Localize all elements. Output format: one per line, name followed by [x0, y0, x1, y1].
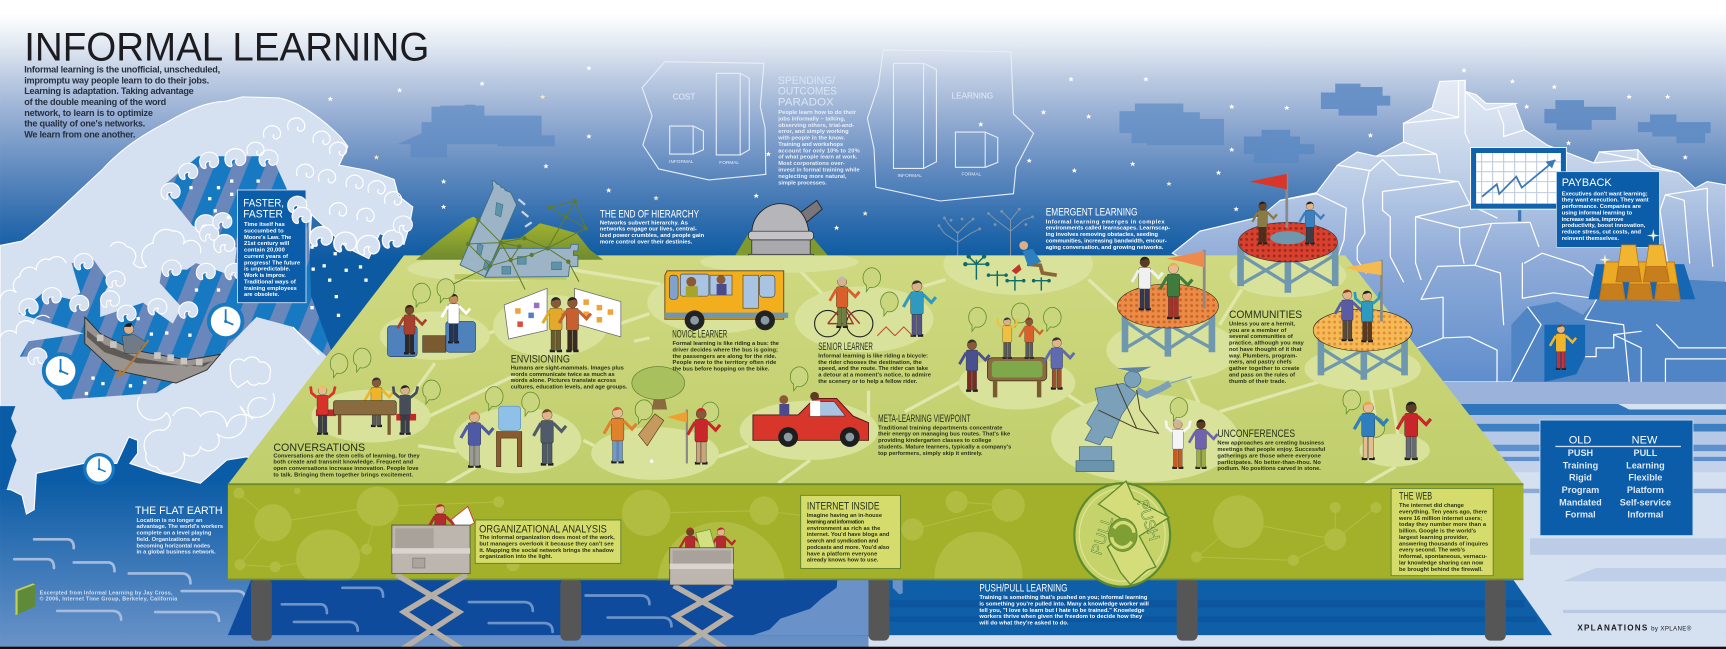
faster, faster callout: FASTER	[243, 208, 283, 220]
meta-learning text: Traditional training departments concentrate	[878, 425, 1002, 431]
emergent learning text: aging conversation, and growing networks.	[1046, 245, 1164, 251]
constellation: cost: COST	[673, 93, 695, 102]
foam outlines	[0, 118, 402, 474]
internet inside box: environment as rich as the	[807, 526, 880, 532]
payback callout: they want execution. They want	[1562, 198, 1649, 204]
senior learner text: the scenery or to help a fellow rider.	[818, 379, 918, 385]
the web box: THE WEB	[1399, 490, 1432, 502]
intro text: network, to learn is to optimize	[24, 108, 153, 118]
the web box: lar knowledge sharing can now	[1399, 560, 1484, 566]
conversations text: both create and transmit knowledge. Frequent and	[273, 460, 414, 466]
faster, faster callout: are obsolete.	[244, 292, 280, 298]
payback callout: reduce stress, cut costs, and	[1562, 230, 1642, 236]
internet inside box: learning and information	[807, 519, 865, 525]
constellation: learning	[867, 50, 1034, 201]
emergent learning text: EMERGENT LEARNING	[1046, 207, 1138, 219]
push/pull learning text: tell you, "I love to learn but I hate to be trained." Knowledge	[979, 608, 1144, 614]
novice learner text: Formal learning is like riding a bus: the	[673, 341, 779, 347]
faster, faster callout: progress! The future	[244, 260, 300, 266]
payback callout: increase sales, improve	[1562, 217, 1623, 223]
envisioning text: words alone. Pictures translate across	[510, 378, 616, 384]
the web box: informal, spontaneous, vernacu-	[1399, 554, 1487, 560]
push pull circle: PUSH	[1133, 498, 1162, 543]
communities text: you are a member of	[1229, 328, 1286, 334]
wave body	[0, 97, 413, 514]
faster, faster callout: contain 20,000	[244, 248, 285, 254]
scissor lift: left	[392, 504, 474, 649]
envisioning text: words communicate twice as much as	[510, 372, 615, 378]
inner foam curls	[19, 149, 412, 364]
conversations text: to talk. Bringing them together brings excitement.	[273, 473, 414, 479]
organizational analysis box: ORGANIZATIONAL ANALYSIS	[479, 523, 607, 535]
clock icons	[42, 303, 244, 485]
spending outcomes paradox: of what people learn at work.	[778, 155, 858, 161]
red car	[753, 392, 869, 447]
cyclist and senior learner	[815, 276, 936, 337]
constellation: cost: FORMAL	[719, 160, 739, 166]
constellation: learning: FORMAL	[961, 172, 982, 178]
faster, faster callout: training employees	[244, 286, 297, 292]
envisioning text: cultures, education levels, and age groups.	[511, 385, 628, 391]
spending outcomes paradox: with people in the know.	[777, 136, 845, 142]
book credit: Excerpted from Informal Learning by Jay Cross,	[40, 590, 173, 596]
stars	[327, 65, 1688, 230]
spending outcomes paradox: PARADOX	[778, 96, 834, 108]
payback callout: using informal learning to	[1562, 210, 1633, 216]
faster, faster callout: Work is improv.	[244, 273, 286, 279]
intro text	[24, 65, 220, 139]
novice learner text: the bus before hopping on the bike.	[673, 367, 770, 373]
spending outcomes paradox: neglecting more natural,	[778, 174, 847, 180]
golf scene	[604, 367, 720, 465]
end of hierarchy text: THE END OF HIERARCHY	[600, 208, 699, 220]
meta-learning text: META-LEARNING VIEWPOINT	[878, 413, 971, 425]
senior learner text: a detour at a moment's notice, to admire	[818, 373, 931, 379]
scissor lift: right	[670, 528, 735, 649]
constellation: learning: LEARNING	[952, 92, 993, 101]
the web box: billion. Google is the world's	[1399, 529, 1476, 535]
intro text: impromptu way people learn to do their jobs.	[24, 75, 209, 85]
old vs new table: Mandated	[1559, 497, 1602, 507]
wall	[485, 244, 578, 277]
senior learner text	[818, 341, 931, 385]
old vs new table: Formal	[1565, 510, 1596, 520]
unconferences text: podium. No positions carved in stone.	[1217, 466, 1321, 472]
the web box: The internet did change	[1399, 503, 1464, 509]
old vs new table: Self-service	[1620, 497, 1671, 507]
windows	[477, 203, 561, 274]
faster, faster callout: Moore's Law. The	[244, 235, 291, 241]
constellation: cost	[642, 62, 766, 180]
spending outcomes paradox: SPENDING/	[778, 75, 836, 87]
icon: speech bubbles	[330, 268, 1385, 441]
publisher logo: XPLANATIONS	[1577, 624, 1648, 633]
payback callout: PAYBACK	[1562, 177, 1612, 189]
meta-learning text: their energy on managing bus routes. That's like	[878, 432, 1010, 438]
senior learner text: SENIOR LEARNER	[818, 341, 873, 353]
community platform: yellow	[1313, 260, 1412, 380]
emergent learning text	[1046, 207, 1170, 251]
faster, faster callout	[237, 190, 311, 303]
conversations text: open conversations increase innovation. People love	[273, 466, 419, 472]
communities text: several communities of	[1229, 334, 1293, 340]
clouds	[397, 84, 1711, 163]
communities text: COMMUNITIES	[1229, 309, 1302, 321]
fallen stones	[518, 199, 532, 227]
faster, faster callout: succumbed to	[244, 228, 284, 234]
internet inside box	[801, 495, 900, 568]
communities text: Unless you are a hermit,	[1229, 321, 1295, 327]
communities text: way. Plumbers, program-	[1228, 353, 1297, 359]
white dots	[85, 179, 368, 395]
emergent learning text: environments called learnscapes. Learnscap-	[1046, 226, 1170, 232]
novice learner text	[672, 329, 779, 373]
flat earth text: advantage. The world's workers	[137, 524, 223, 530]
flat earth text: THE FLAT EARTH	[135, 505, 223, 517]
intro text: of the double meaning of the word	[24, 97, 166, 107]
network	[454, 199, 588, 289]
push/pull learning text	[978, 582, 1149, 627]
figures: sofa conversation	[387, 294, 476, 357]
old vs new table: Platform	[1627, 485, 1664, 495]
intro text: Informal learning is the unofficial, unscheduled,	[24, 65, 220, 75]
whiteboards	[504, 288, 621, 352]
faster, faster callout: current years of	[244, 254, 288, 260]
novice learner text: the passengers are along for the ride.	[673, 354, 777, 360]
envisioning text: ENVISIONING	[511, 354, 570, 366]
pale base band	[455, 274, 567, 280]
sea dashes	[14, 539, 245, 621]
faster, faster callout: is unpredictable.	[244, 267, 291, 273]
end of hierarchy text: Networks subvert hierarchy. As	[600, 220, 688, 226]
spending outcomes paradox: observing others, trial-and-	[778, 123, 854, 129]
conversations text	[273, 442, 421, 479]
organizational analysis box: The informal organization does most of the work,	[479, 535, 615, 541]
old vs new table: Learning	[1626, 460, 1665, 470]
internet inside box: already knows how to use.	[807, 558, 879, 564]
left edge water	[0, 406, 17, 490]
intro text: Learning is adaptation. Taking advantage	[24, 86, 194, 96]
unconferences text	[1217, 428, 1326, 472]
novice learner text: driver decides where the bus is going;	[673, 347, 778, 353]
pool table	[959, 318, 1074, 397]
push/pull learning text: workers thrive when given the freedom to decide how they	[978, 614, 1143, 620]
payback callout	[1556, 172, 1659, 247]
spending outcomes paradox: Most corporations over-	[778, 161, 845, 167]
end of hierarchy text: more control over their destinies.	[600, 239, 693, 245]
icebergs	[1172, 80, 1726, 382]
meeting at table	[311, 378, 418, 435]
flat earth text: complete on a level playing	[137, 531, 212, 537]
internet inside box: Imagine having an in-house	[807, 513, 882, 519]
bottom bar	[0, 647, 1726, 649]
last pair of people	[1354, 402, 1431, 460]
book icon	[15, 583, 35, 615]
push pull circle: PULL	[1088, 514, 1117, 557]
senior learner text: the rider chooses the destination, the	[818, 360, 922, 366]
castle	[416, 181, 603, 289]
water under the platform	[228, 580, 1726, 647]
tower	[460, 181, 517, 277]
constellation: learning: INFORMAL	[897, 173, 922, 179]
book credit: © 2006, Internet Time Group, Berkeley, California	[40, 596, 178, 603]
statue being pulled down	[1076, 367, 1218, 472]
old vs new table: PUSH	[1568, 448, 1593, 458]
payback callout: productivity, boost innovation,	[1562, 223, 1646, 229]
flat earth text: in a global business network.	[137, 550, 216, 556]
senior learner text: speed, and the route. The rider can take	[818, 366, 928, 372]
intro text: the quality of one's networks.	[24, 119, 145, 129]
faster, faster callout: Traditional ways of	[244, 279, 296, 285]
publisher logo	[1577, 624, 1692, 633]
unconferences text: participates. No better-than-thou. No	[1217, 460, 1321, 466]
emergent learning text: communities, increasing bandwidth, encour-	[1046, 238, 1167, 244]
communities text: and pass on the rules of	[1229, 372, 1295, 378]
novice learner text: People new to the territory often ride	[673, 360, 776, 366]
the web box: answering thousands of inquires	[1399, 541, 1488, 547]
faster, faster callout: 21st century will	[244, 241, 290, 247]
payback callout: reinvent themselves.	[1562, 236, 1619, 242]
unconferences text: UNCONFERENCES	[1217, 428, 1295, 440]
push/pull learning text: is something you're pulled into. Many a knowledge worker will	[979, 601, 1149, 607]
the web box: largest learning provider,	[1399, 535, 1469, 541]
communities text: not have thought of it that	[1229, 347, 1302, 353]
front network circles	[234, 486, 1382, 580]
berg silhouette	[1172, 80, 1726, 382]
flat earth text: field. Organizations are	[137, 537, 200, 543]
senior learner text: Informal learning is like riding a bicycle:	[818, 353, 928, 359]
platform front face	[228, 483, 1524, 580]
internet inside box: search and syndication and	[807, 539, 879, 545]
flat earth text: Location is no longer an	[137, 518, 203, 524]
communities text: gather together to create	[1229, 366, 1299, 372]
meta-learning text: providing kindergarten classes to college	[878, 438, 991, 444]
barrel stripes upper	[162, 156, 312, 308]
meta-learning text	[878, 413, 1011, 457]
envisioning text	[510, 354, 628, 391]
the web box: every second. The web's	[1399, 548, 1465, 554]
organizational analysis box: organization into the light.	[479, 554, 553, 560]
internet inside box: internet. You'd have blogs and	[807, 532, 890, 538]
push/pull learning text: Training is something that's pushed on you; informal learning	[979, 595, 1148, 601]
platform legs	[251, 579, 1506, 641]
organizational analysis box	[475, 520, 621, 563]
old vs new table: Informal	[1627, 510, 1663, 520]
communities text: thumb of their trade.	[1229, 379, 1287, 385]
old vs new table	[1540, 420, 1693, 536]
spending outcomes paradox: simple processes.	[778, 180, 827, 186]
push pull circle	[1074, 481, 1170, 587]
platform top surface	[228, 233, 1523, 484]
observatory	[735, 200, 828, 259]
bus	[665, 271, 788, 330]
book credit	[40, 590, 178, 603]
old vs new table: Training	[1563, 460, 1598, 470]
wave illustration	[0, 97, 413, 514]
hiker figure	[1550, 324, 1576, 370]
waterfall	[753, 580, 869, 635]
emergent grey trees	[938, 208, 1034, 260]
constellation: cost: INFORMAL	[669, 159, 694, 165]
payback callout: performance. Companies are	[1562, 204, 1641, 210]
intro text: We learn from one another.	[24, 129, 135, 139]
meta-learning text: students. Mature learners, typically a company's	[878, 444, 1011, 450]
spending outcomes paradox	[777, 75, 860, 186]
gold bars	[1588, 229, 1695, 300]
unconferences text: gatherings are those where everyone	[1217, 453, 1321, 459]
community platform: orange	[1117, 250, 1219, 357]
spending outcomes paradox: error, and simply working	[778, 129, 849, 135]
spending outcomes paradox: jobs informally – talking,	[777, 116, 846, 122]
spending outcomes paradox: OUTCOMES	[778, 86, 837, 98]
end of hierarchy text: networks engage our lives, central-	[600, 227, 697, 233]
spending outcomes paradox: People learn how to do their	[778, 110, 857, 116]
emergent plants and gardener	[963, 241, 1057, 291]
water cooler group	[461, 406, 566, 468]
internet inside box: have a platform everyone	[807, 551, 877, 557]
old vs new table: NEW	[1632, 434, 1658, 446]
chart billboard	[1471, 148, 1566, 221]
flat earth text	[135, 505, 223, 556]
the web box: everything. Ten years ago, there	[1399, 509, 1487, 515]
activity pads	[312, 233, 1430, 482]
old vs new table: Flexible	[1628, 473, 1662, 483]
hills behind castle	[416, 217, 603, 260]
boat with rower	[85, 317, 220, 383]
hiker panel	[1544, 325, 1585, 382]
communities text	[1228, 309, 1305, 385]
unconferences text: New approaches are creating business	[1217, 441, 1324, 447]
envisioning text: Humans are sight-mammals. Images plus	[511, 365, 624, 371]
old vs new table: PULL	[1633, 448, 1658, 458]
faster, faster callout: Time itself has	[244, 222, 285, 228]
facet lines	[1280, 80, 1726, 382]
barrel stripes lower with boat pocket	[19, 248, 334, 400]
the web box: were 16 million internet users;	[1398, 516, 1482, 522]
the web box: be brought behind the firewall.	[1399, 567, 1483, 573]
right-hand stripes	[1431, 382, 1726, 649]
emergent learning text: ing involves removing obstacles, seeding	[1046, 232, 1158, 238]
path network	[407, 270, 1398, 484]
end of hierarchy text	[600, 208, 705, 245]
the web box: today they number more than a	[1399, 522, 1487, 528]
conversations text: CONVERSATIONS	[273, 442, 365, 454]
old vs new table: OLD	[1569, 434, 1591, 446]
title: INFORMAL LEARNING	[24, 26, 429, 70]
old vs new table: Program	[1562, 485, 1599, 495]
spending outcomes paradox: account for only 10% to 20%	[778, 148, 860, 154]
faster, faster callout: FASTER,	[243, 198, 284, 210]
water dashes	[282, 588, 671, 632]
end of hierarchy text: ized power crumbles, and people gain	[600, 233, 705, 239]
old vs new table: Rigid	[1569, 473, 1592, 483]
communities text: mers, and pastry chefs	[1229, 360, 1292, 366]
communities text: practice, although you may	[1229, 341, 1305, 347]
spending outcomes paradox: invest in formal training while	[778, 167, 860, 173]
spending outcomes paradox: Training and workshops	[778, 142, 843, 148]
emergent learning text: Informal learning emerges in complex	[1046, 219, 1165, 225]
publisher logo: by XPLANE®	[1651, 626, 1692, 633]
payback callout: Executives don't want learning;	[1562, 191, 1648, 197]
organizational analysis box: it. Mapping the social network brings the shadow	[479, 548, 614, 554]
push/pull learning text: PUSH/PULL LEARNING	[979, 582, 1067, 594]
push/pull learning text: will do what they're asked to do.	[978, 621, 1069, 627]
internet inside box: podcasts and more. You'd also	[807, 545, 890, 551]
the web box	[1391, 488, 1493, 576]
conversations text: Conversations are the stem cells of learning, for they	[273, 453, 421, 459]
internet inside box: INTERNET INSIDE	[807, 500, 880, 512]
unconferences text: meetings that people enjoy. Successful	[1217, 447, 1326, 453]
flat earth text: becoming horizontal nodes	[137, 543, 210, 549]
organizational analysis box: but managers overlook it because they can't see	[479, 541, 614, 547]
lower right facets	[1511, 280, 1726, 382]
novice learner text: NOVICE LEARNER	[672, 329, 727, 341]
community platform: red	[1237, 173, 1339, 293]
meta-learning text: top performers, simply skip it entirely.	[878, 451, 983, 457]
